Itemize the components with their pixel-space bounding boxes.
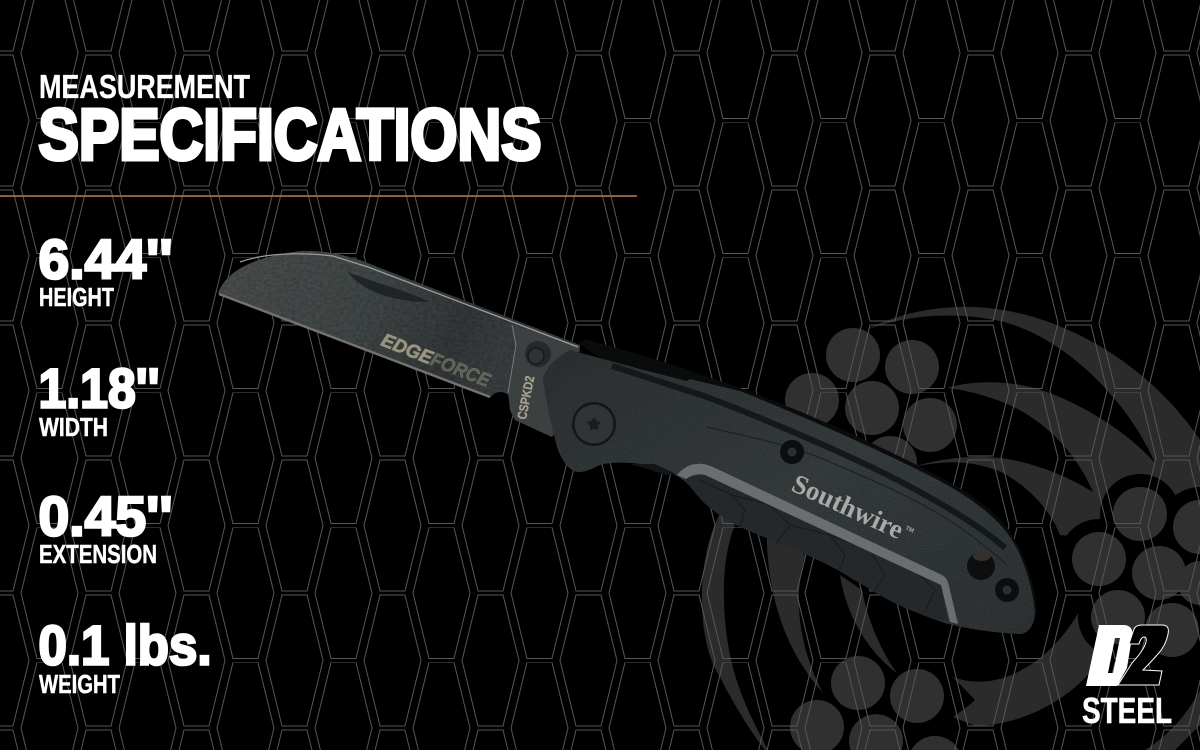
tang plate bbox=[508, 325, 580, 437]
label: WEIGHT bbox=[39, 669, 120, 699]
dark groove bbox=[612, 366, 1005, 548]
copper divider bbox=[0, 195, 637, 197]
label: WIDTH bbox=[39, 412, 108, 442]
lock pin bbox=[967, 551, 995, 580]
icon: D letter bbox=[1086, 625, 1132, 686]
label: HEIGHT bbox=[39, 282, 114, 312]
handle pivot screw bbox=[572, 402, 616, 446]
stat: weight bbox=[38, 614, 212, 699]
handle screw two bbox=[995, 578, 1019, 602]
D2 steel badge bbox=[1082, 625, 1172, 731]
cluster halos bbox=[1059, 474, 1200, 657]
value: 0.45'' bbox=[38, 484, 172, 548]
handle body bbox=[543, 350, 1035, 634]
circle cluster right bbox=[1072, 487, 1200, 657]
value: 1.18'' bbox=[38, 356, 160, 420]
CSPKD2 etching: CSPKD2 bbox=[514, 375, 537, 421]
Southwire wordmark: TM bbox=[904, 526, 915, 535]
heading bbox=[38, 68, 542, 176]
blade pivot screw bbox=[525, 341, 551, 367]
thumb stud notch bbox=[630, 464, 676, 475]
cutting edge bevel bbox=[219, 294, 490, 397]
icon: outlined 2 bbox=[1118, 625, 1168, 685]
value: 6.44'' bbox=[38, 228, 172, 290]
stat: width bbox=[38, 356, 160, 442]
stat: extension bbox=[38, 484, 172, 569]
blade body bbox=[218, 251, 580, 437]
EDGEFORCE etching: FORCE bbox=[427, 350, 494, 392]
thin groove bbox=[707, 427, 1007, 565]
swirl arc far bottom right bbox=[1145, 690, 1200, 750]
value: 0.1 lbs. bbox=[38, 614, 212, 676]
handle screw one bbox=[780, 440, 804, 464]
swirl arcs top right bbox=[866, 307, 1200, 540]
swirl arcs left bbox=[702, 505, 897, 750]
handle back spine bbox=[578, 339, 1037, 634]
Southwire wordmark: Southwire bbox=[788, 468, 908, 545]
fuller groove bbox=[348, 272, 430, 302]
stat: height bbox=[38, 228, 172, 312]
circle cluster top bbox=[785, 328, 957, 490]
heading line two: SPECIFICATIONS bbox=[38, 94, 542, 176]
blade bbox=[218, 251, 580, 437]
heading line one: MEASUREMENT bbox=[39, 68, 250, 105]
handle bbox=[543, 339, 1037, 634]
EDGEFORCE etching: EDGE bbox=[378, 330, 436, 370]
label: EXTENSION bbox=[39, 539, 157, 569]
spine highlight bbox=[240, 254, 578, 347]
grip hexagon texture bbox=[700, 480, 935, 612]
EDGEFORCE etching bbox=[378, 330, 494, 392]
rubber grip bbox=[683, 474, 948, 621]
tang edge highlight bbox=[508, 325, 516, 393]
knife bbox=[218, 251, 1037, 634]
steel label: STEEL bbox=[1082, 690, 1172, 731]
swirl arc bottom right bbox=[953, 590, 1110, 726]
circle cluster bottom bbox=[790, 656, 959, 750]
grey grip trim bbox=[677, 464, 958, 624]
swirl logo watermark bbox=[702, 307, 1200, 750]
